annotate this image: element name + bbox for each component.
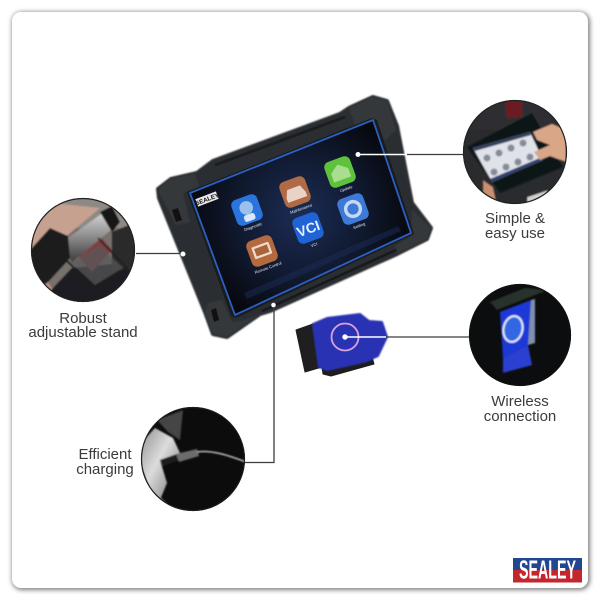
infographic canvas (29, 94, 582, 582)
app icon: update (323, 155, 360, 196)
app icon: vci (291, 211, 328, 252)
photo: charging cable (140, 407, 246, 512)
label: robust adjustable stand: adjustable stand (28, 324, 138, 341)
label: efficient charging: Efficient (78, 446, 132, 463)
tablet inner bezel (187, 118, 414, 318)
photo: adjustable stand (30, 198, 136, 305)
app icon: maintenance: Maintenance (289, 202, 313, 215)
tablet side port (172, 208, 182, 222)
tablet screen with blue edge (190, 120, 411, 315)
callout line: charging (245, 303, 276, 462)
tablet corner bumpers (158, 97, 431, 337)
dongle light ring (332, 324, 358, 350)
label: simple and easy use: easy use (485, 225, 545, 242)
app icon: setting (336, 192, 373, 233)
app icon: vci: VCI (294, 217, 322, 240)
tablet lower port (211, 308, 219, 322)
label: simple and easy use: Simple & (485, 210, 545, 227)
label: efficient charging: charging (76, 461, 134, 478)
app icon: diagnostic (230, 193, 267, 234)
app icon: update: Update (339, 184, 354, 193)
app icon: maintenance (278, 175, 315, 216)
vci dongle (296, 314, 387, 376)
label: wireless connection: Wireless (491, 393, 549, 410)
tablet rugged body (158, 97, 431, 337)
label: wireless connection: connection (484, 408, 556, 425)
app icon: remote control: Remote Control (254, 260, 282, 275)
callout line: stand (136, 252, 186, 256)
sealey mini logo: SEALEY (194, 192, 221, 207)
callout line: screen (356, 152, 464, 157)
app icon: diagnostic: Diagnostic (243, 221, 263, 232)
screen status bar (244, 226, 401, 299)
dongle connector (296, 324, 322, 372)
app icon: setting: Setting (352, 221, 366, 230)
dongle rubber base (322, 357, 374, 376)
label: robust adjustable stand: Robust (59, 310, 108, 327)
photo: touch screen use (463, 100, 567, 205)
photo: wireless dongle (469, 284, 571, 386)
callout line: wireless (342, 334, 470, 340)
app icon: remote control (244, 233, 282, 275)
tablet bottom groove (262, 250, 396, 311)
tablet ridge (215, 117, 345, 165)
dongle blue body (313, 314, 387, 370)
tablet (158, 97, 431, 337)
app icon: vci: VCI (310, 241, 318, 248)
